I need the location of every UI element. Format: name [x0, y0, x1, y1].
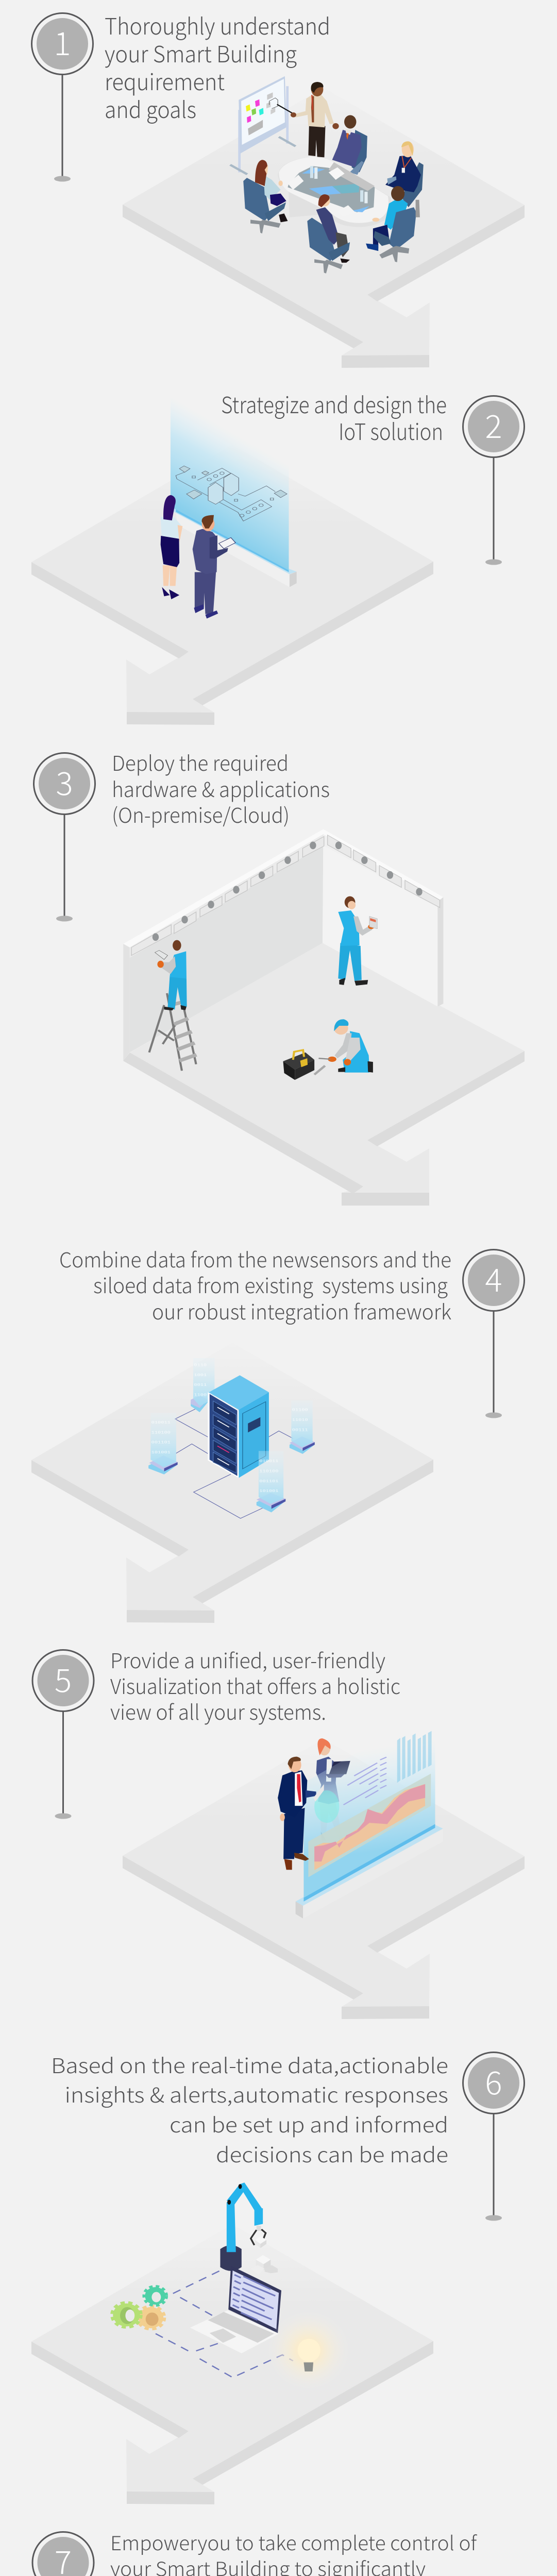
text: step 4: Combine data from the newsensors and the — [59, 1244, 451, 1274]
text: step 7 — [110, 2528, 478, 2576]
text: step 1 — [105, 8, 330, 125]
blond man, right — [385, 141, 424, 207]
step number 5 — [32, 1650, 94, 1819]
whiteboard — [230, 76, 296, 174]
gears — [112, 2286, 166, 2329]
platform with arrow — [31, 2224, 433, 2504]
light bulb glow — [267, 2311, 349, 2389]
text: step 6: insights & alerts,automatic responses — [65, 2079, 448, 2109]
network lines — [175, 1407, 293, 1518]
man with tablet from behind — [193, 515, 235, 619]
woman, front — [307, 194, 350, 274]
back data node: 1001 — [194, 1373, 207, 1377]
illustration: two people at glass display — [161, 396, 297, 619]
text: step 1: and goals — [105, 92, 196, 125]
step number 4 — [463, 1250, 525, 1418]
panel: step 7 — [32, 2528, 525, 2576]
text: step 3: Deploy the required — [112, 747, 289, 777]
panel: step 2 — [31, 387, 525, 725]
woman with laptop — [316, 1738, 350, 1840]
front data node — [257, 1451, 285, 1512]
server rack — [208, 1375, 269, 1478]
worker at wall panel — [338, 896, 377, 986]
left data node: 110100 — [151, 1431, 171, 1435]
seated man, top right — [332, 115, 367, 175]
illustration: people viewing dashboard — [278, 1708, 443, 1919]
front data node: 010011 — [259, 1459, 278, 1463]
text: step 1: requirement — [105, 64, 225, 97]
presenter — [277, 82, 339, 157]
step number 4: 4 — [485, 1255, 502, 1301]
text: step 6: decisions can be made — [216, 2139, 448, 2168]
kneeling worker — [314, 1019, 373, 1075]
text: step 3: hardware & applications — [112, 773, 330, 803]
platform with arrow — [31, 445, 433, 725]
display stand — [171, 505, 297, 587]
worker on ladder with camera — [155, 940, 187, 1010]
panel: step 1 — [32, 8, 525, 368]
right data node — [290, 1400, 315, 1454]
text: step 1: Thoroughly understand — [105, 8, 330, 41]
text: step 6 — [51, 2049, 448, 2168]
glass panel — [171, 396, 289, 570]
text: step 5: Visualization that offers a holistic — [110, 1670, 400, 1700]
step number 3: 3 — [56, 758, 73, 804]
back data node — [191, 1358, 214, 1412]
text: step 5: Provide a unified, user-friendly — [110, 1645, 385, 1674]
right data node: 11010 — [292, 1418, 308, 1422]
text: step 6: can be set up and informed — [170, 2109, 448, 2139]
platform with arrow — [123, 1739, 525, 2019]
step number 1 — [32, 13, 93, 181]
back data node: 0011 — [194, 1383, 207, 1387]
text: step 2 — [221, 387, 447, 447]
ladder — [149, 987, 196, 1071]
text: step 3: (On-premise/Cloud) — [112, 799, 290, 829]
woman, left — [243, 160, 288, 233]
panel: step 6 — [31, 2049, 525, 2504]
display stand — [296, 1825, 443, 1919]
right data node: 00111 — [292, 1428, 308, 1432]
text: step 6: Based on the real-time data,actionable — [51, 2049, 448, 2079]
step number 6: 6 — [485, 2057, 502, 2104]
text: step 5: view of all your systems. — [110, 1696, 326, 1726]
front data node: 101001 — [259, 1489, 278, 1494]
man, front right — [366, 186, 420, 262]
front data node: 110100 — [259, 1469, 278, 1473]
toolbox — [283, 1050, 314, 1080]
text: step 1: your Smart Building — [105, 36, 297, 69]
text: step 4: our robust integration framework — [152, 1296, 451, 1326]
text: step 2: IoT solution — [339, 414, 443, 447]
step number 7 — [32, 2532, 94, 2576]
woman from behind — [161, 495, 182, 599]
illustration: automation workflow — [112, 2182, 349, 2389]
text: step 5 — [110, 1645, 400, 1726]
step number 3 — [34, 753, 95, 921]
conference table — [278, 157, 391, 227]
right data node: 01100 — [292, 1408, 308, 1412]
front data node: 001101 — [259, 1479, 278, 1483]
man in suit — [278, 1757, 324, 1870]
illustration: server rack and data nodes — [148, 1358, 315, 1518]
back data node: 0110 — [194, 1363, 207, 1367]
step number 2: 2 — [485, 401, 502, 447]
text: step 4: siloed data from existing systems using — [93, 1269, 448, 1299]
small cubes — [251, 2236, 278, 2275]
text: step 7: Empoweryou to take complete control of — [110, 2528, 478, 2556]
left data node: 101001 — [151, 1450, 171, 1455]
text: step 4 — [59, 1244, 451, 1326]
robotic arm — [220, 2182, 266, 2271]
platform with arrow — [31, 1343, 433, 1623]
dashed data flows — [156, 2270, 293, 2378]
step number 6 — [463, 2053, 525, 2221]
left data node: 010011 — [151, 1420, 171, 1425]
back data node: 1100 — [194, 1393, 207, 1397]
illustration: workers installing devices — [149, 896, 377, 1080]
text: step 3 — [112, 747, 330, 829]
glass panel with area chart — [303, 1708, 435, 1902]
left data node — [148, 1413, 178, 1475]
step number 5: 5 — [55, 1655, 72, 1701]
step number 1: 1 — [54, 18, 71, 64]
laptop — [190, 2266, 281, 2353]
room walls with ceiling vents — [123, 829, 443, 1061]
platform with arrow — [123, 88, 525, 368]
room floor with arrow — [123, 943, 525, 1206]
panel: step 5 — [32, 1645, 525, 2019]
smart city circuit diagram — [176, 466, 287, 521]
panel: step 3 — [34, 747, 525, 1206]
illustration: meeting around a table — [230, 76, 424, 274]
panel: step 4 — [31, 1244, 525, 1623]
left data node: 001101 — [151, 1440, 171, 1445]
step number 2 — [463, 396, 525, 565]
text: step 2: Strategize and design the — [221, 387, 447, 420]
